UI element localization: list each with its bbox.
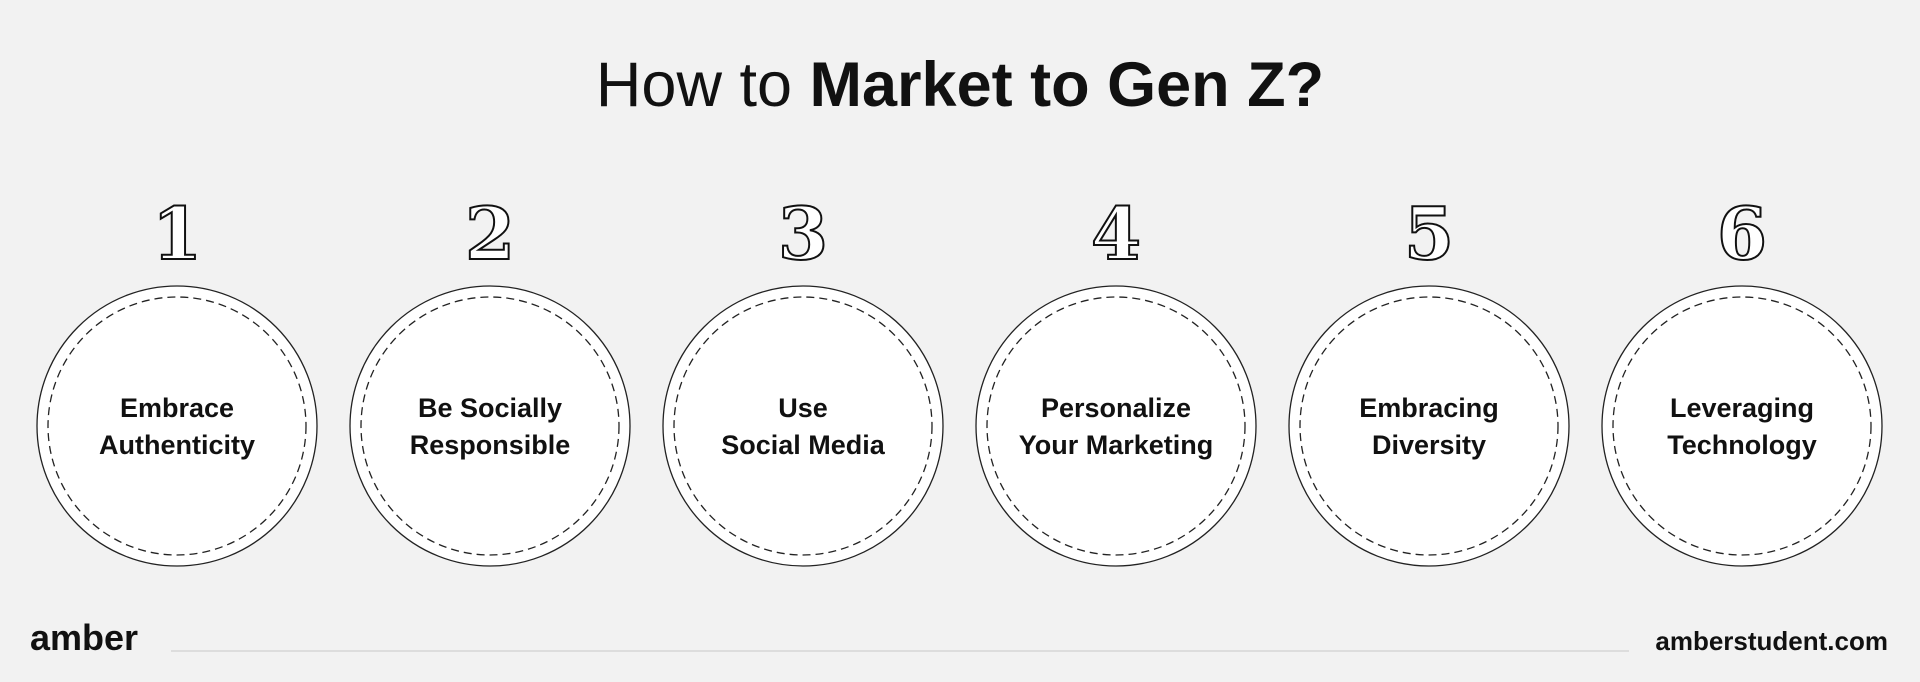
step 4: 4: [1091, 191, 1141, 276]
step 3: [663, 191, 943, 566]
step 6: Technology: [1667, 430, 1817, 460]
step 1: [37, 191, 317, 566]
step 4: [976, 191, 1256, 566]
footer logo: amber: [30, 617, 138, 658]
step 6: 6: [1717, 191, 1767, 276]
title: How to Market to Gen Z?: [596, 50, 1324, 120]
step 4: Personalize: [1041, 393, 1191, 423]
step 6: [1602, 191, 1882, 566]
step 5: Embracing: [1359, 393, 1499, 423]
step 1: 1: [152, 191, 202, 276]
step 3: 3: [778, 191, 828, 276]
footer url: amberstudent.com: [1655, 626, 1888, 656]
step 6: Leveraging: [1670, 393, 1814, 423]
step 1: Authenticity: [99, 430, 255, 460]
step 2: Be Socially: [418, 393, 562, 423]
step 5: 5: [1404, 191, 1454, 276]
step 5: [1289, 191, 1569, 566]
step 4: Your Marketing: [1019, 430, 1213, 460]
step 2: 2: [465, 191, 515, 276]
step 2: Responsible: [410, 430, 570, 460]
step 2: [350, 191, 630, 566]
step 3: Social Media: [721, 430, 886, 460]
step 5: Diversity: [1372, 430, 1486, 460]
step 1: Embrace: [120, 393, 234, 423]
step 3: Use: [778, 393, 828, 423]
